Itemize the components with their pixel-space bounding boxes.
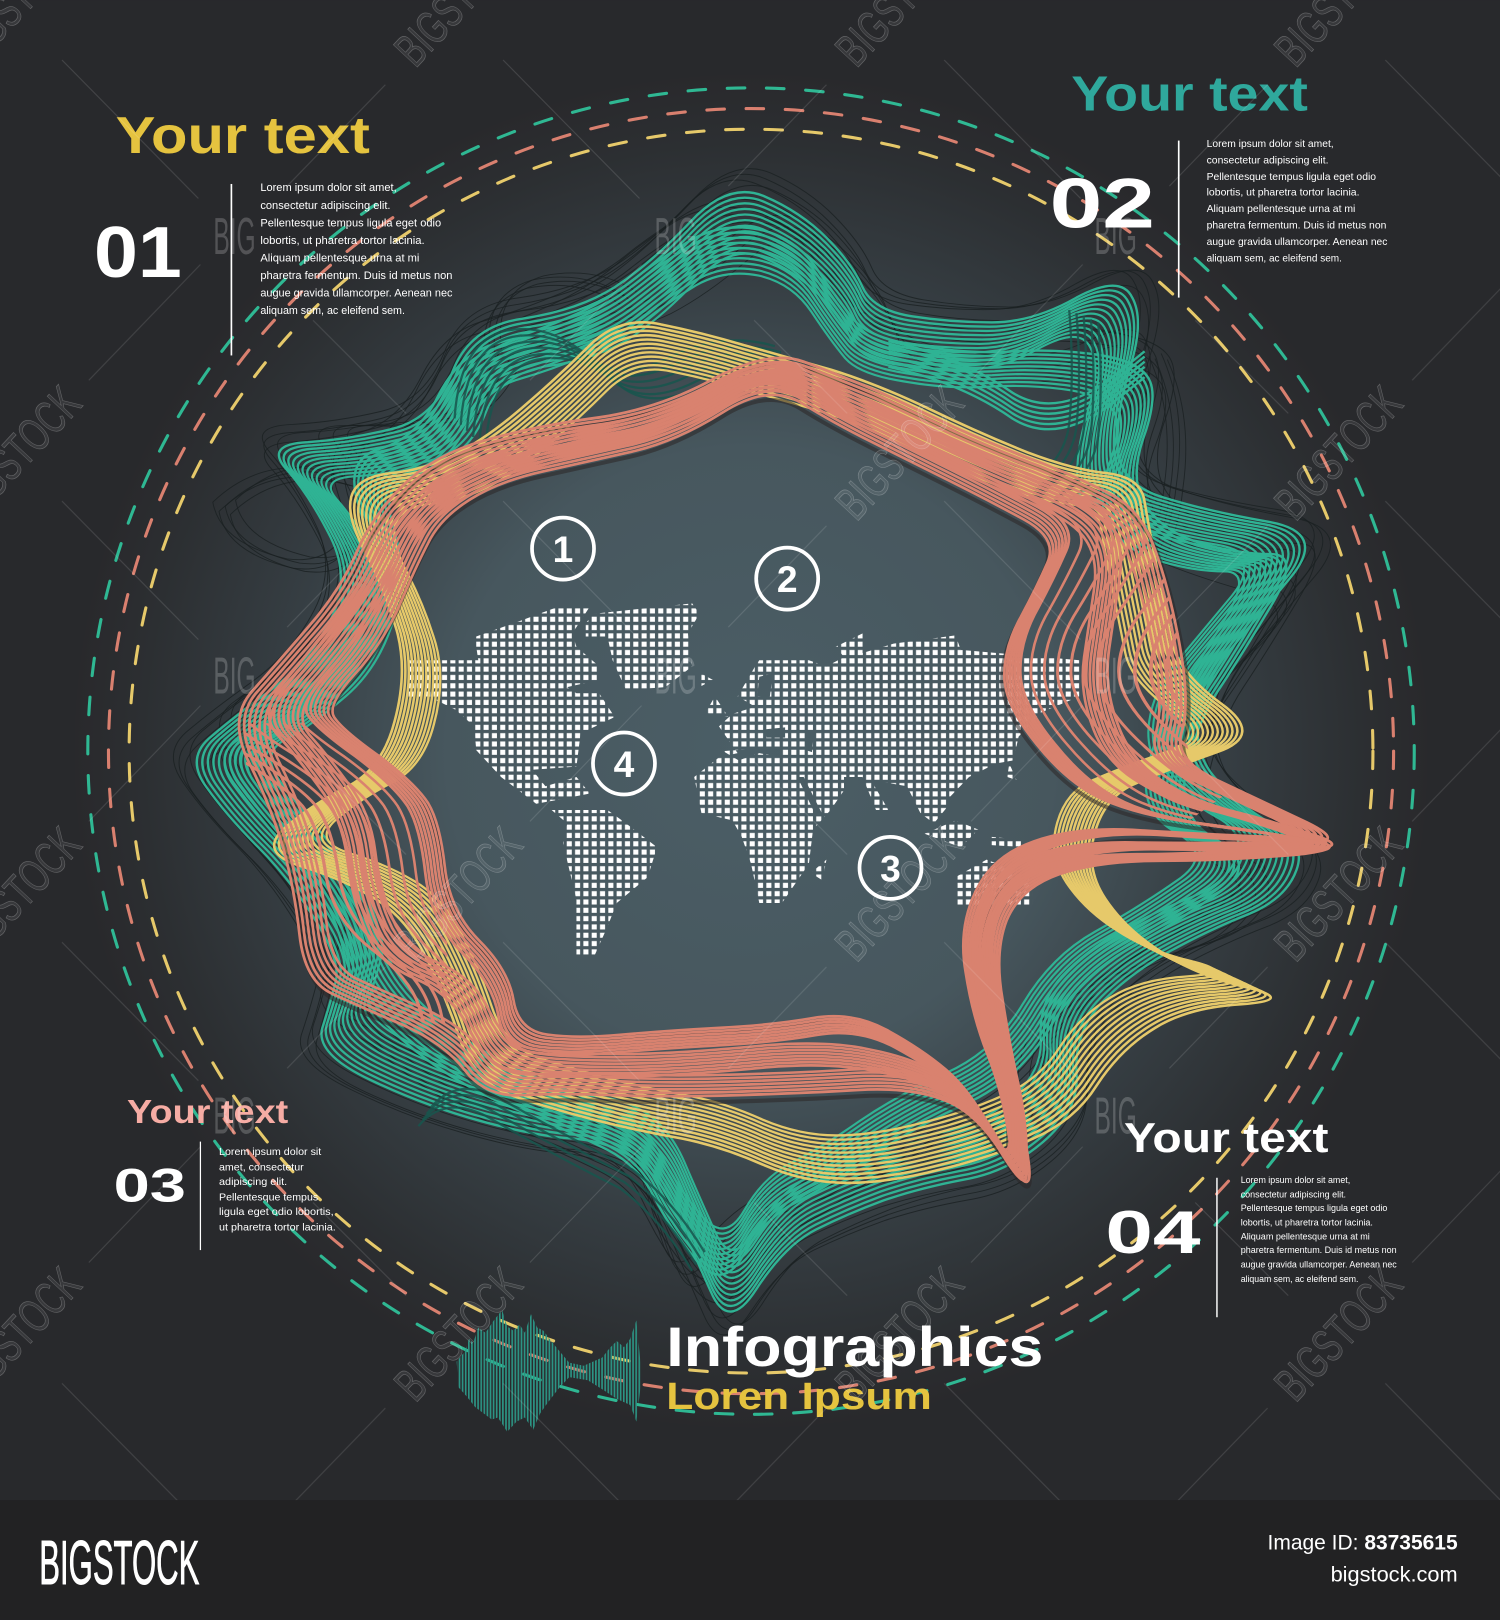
number 03: 03 [114,1160,186,1213]
number 01: 01 [94,213,182,293]
text 03: ligula eget odio lobortis, [219,1207,334,1218]
central radial glow [74,74,1428,1428]
subtitle: Loren Ipsum [666,1375,932,1418]
number 02: 02 [1050,163,1155,242]
ribbon: yellow [274,322,1271,1183]
text 01: Aliquam pellentesque urna at mi [260,252,419,264]
map marker 3: 3 [880,847,901,889]
map marker 3 [860,837,921,899]
watermark: BIG repeats: BIG [654,646,697,704]
number 04: 04 [1105,1199,1200,1266]
eurasia and africa [694,633,1080,903]
text 04: lobortis, ut pharetra tortor lacinia. [1241,1217,1373,1227]
text 01: consectetur adipiscing elit. [260,200,390,212]
text 03: ut pharetra tortor lacinia. [219,1222,336,1233]
map marker 4: 4 [614,743,635,785]
main title: Infographics [666,1316,1043,1378]
text: BIG [1095,646,1137,704]
ribbon: coral spread strands left [246,723,448,1023]
watermark: BIGSTOCK repeats: BIGSTOCK [826,377,974,530]
text 04: Pellentesque tempus ligula eget odio [1241,1203,1387,1213]
ribbon: dark contour lines [167,163,1334,1341]
heading 04: Your text [1124,1115,1329,1161]
heading 02: Your text [1071,66,1308,122]
watermark: BIGSTOCK repeats: BIGSTOCK [385,1258,533,1411]
watermark: BIGSTOCK repeats: BIGSTOCK [1265,818,1413,971]
heading 03: Your text [127,1094,288,1131]
footer image id: Image ID: 83735615 [1268,1532,1458,1555]
panel: block 01 [94,106,453,355]
map marker 2 [756,548,818,610]
text 03: adipiscing elit. [219,1177,287,1188]
ribbon: coral shadow [242,364,1331,1187]
map marker 1 [532,518,594,580]
text 02: Lorem ipsum dolor sit amet, [1207,139,1334,150]
north america [407,606,615,804]
text 02: pharetra fermentum. Duis id metus non [1207,220,1387,231]
text 01: Lorem ipsum dolor sit amet, [260,182,397,194]
panel: block 02 [1050,66,1387,298]
text: BIG [1095,1086,1137,1144]
text 04 [1241,1175,1397,1284]
ribbon: dark teal loops [418,310,1101,1271]
text 01: aliquam sem, ac eleifend sem. [260,305,405,317]
text 02 [1207,139,1387,264]
ribbon: coral [239,358,1332,1182]
watermark: BIGSTOCK repeats: BIGSTOCK [826,1258,974,1411]
watermark: BIG repeats: BIG [654,1086,697,1144]
watermark: BIG repeats: BIG [213,646,256,704]
text 02: lobortis, ut pharetra tortor lacinia. [1207,187,1360,198]
dashed concentric rings [88,88,1414,1414]
ribbon: teal [197,192,1305,1312]
watermark: BIG repeats: BIG [654,207,697,265]
map marker 1: 1 [553,528,573,570]
text 04: augue gravida ullamcorper. Aenean nec [1241,1260,1397,1270]
text 02: augue gravida ullamcorper. Aenean nec [1207,237,1387,248]
footer logo: BIGSTOCK [39,1529,199,1598]
panel: block 04 [1105,1115,1397,1317]
text 01: lobortis, ut pharetra tortor lacinia. [260,235,425,247]
text 01 [260,182,453,317]
watermark: BIGSTOCK repeats: BIGSTOCK [826,818,974,971]
watermark: BIGSTOCK repeats: BIGSTOCK [1265,1258,1413,1411]
heading 01: Your text [116,106,370,164]
text: BIG [1095,207,1137,265]
watermark: BIG repeats: BIG [213,1086,256,1144]
text 02: consectetur adipiscing elit. [1207,155,1329,166]
text 04: Aliquam pellentesque urna at mi [1241,1232,1370,1242]
text 02: aliquam sem, ac eleifend sem. [1207,253,1342,264]
text 02: Aliquam pellentesque urna at mi [1207,204,1355,215]
watermark: BIG repeats [213,207,1137,1144]
text 04: Lorem ipsum dolor sit amet, [1241,1175,1350,1185]
divider 01 [231,184,232,355]
world map dotted [407,603,1080,957]
text 01: augue gravida ullamcorper. Aenean nec [260,288,453,300]
greenland [586,603,699,690]
text 04: consectetur adipiscing elit. [1241,1189,1346,1199]
footer site: bigstock.com [1331,1564,1458,1587]
text 04: aliquam sem, ac eleifend sem. [1241,1274,1358,1284]
text 03: Pellentesque tempus [219,1192,318,1203]
map marker 2: 2 [777,558,798,600]
text 03 [219,1147,336,1233]
islands [701,674,1023,880]
divider 02 [1178,141,1180,298]
text 03: amet, consectetur [219,1163,304,1174]
panel: block 03 [114,1094,336,1250]
text 01: pharetra fermentum. Duis id metus non [260,270,452,282]
text 02: Pellentesque tempus ligula eget odio [1207,172,1376,183]
icon: sound waveform [457,1310,640,1432]
ribbon: coral spread strands right [1028,496,1222,819]
divider 03 [200,1142,201,1250]
text 04: pharetra fermentum. Duis id metus non [1241,1245,1397,1255]
south america [552,810,657,957]
map marker 4 [593,733,655,795]
australia [956,860,1032,907]
watermark: BIG repeats: BIG [213,207,256,265]
watermark: BIGSTOCK repeats: BIGSTOCK [1265,377,1413,530]
text 03: Lorem ipsum dolor sit [219,1147,321,1158]
watermark: BIGSTOCK repeats: BIGSTOCK [385,818,533,971]
footer band [0,1500,1500,1620]
text 01: Pellentesque tempus ligula eget odio [260,217,441,229]
divider 04 [1216,1178,1218,1317]
